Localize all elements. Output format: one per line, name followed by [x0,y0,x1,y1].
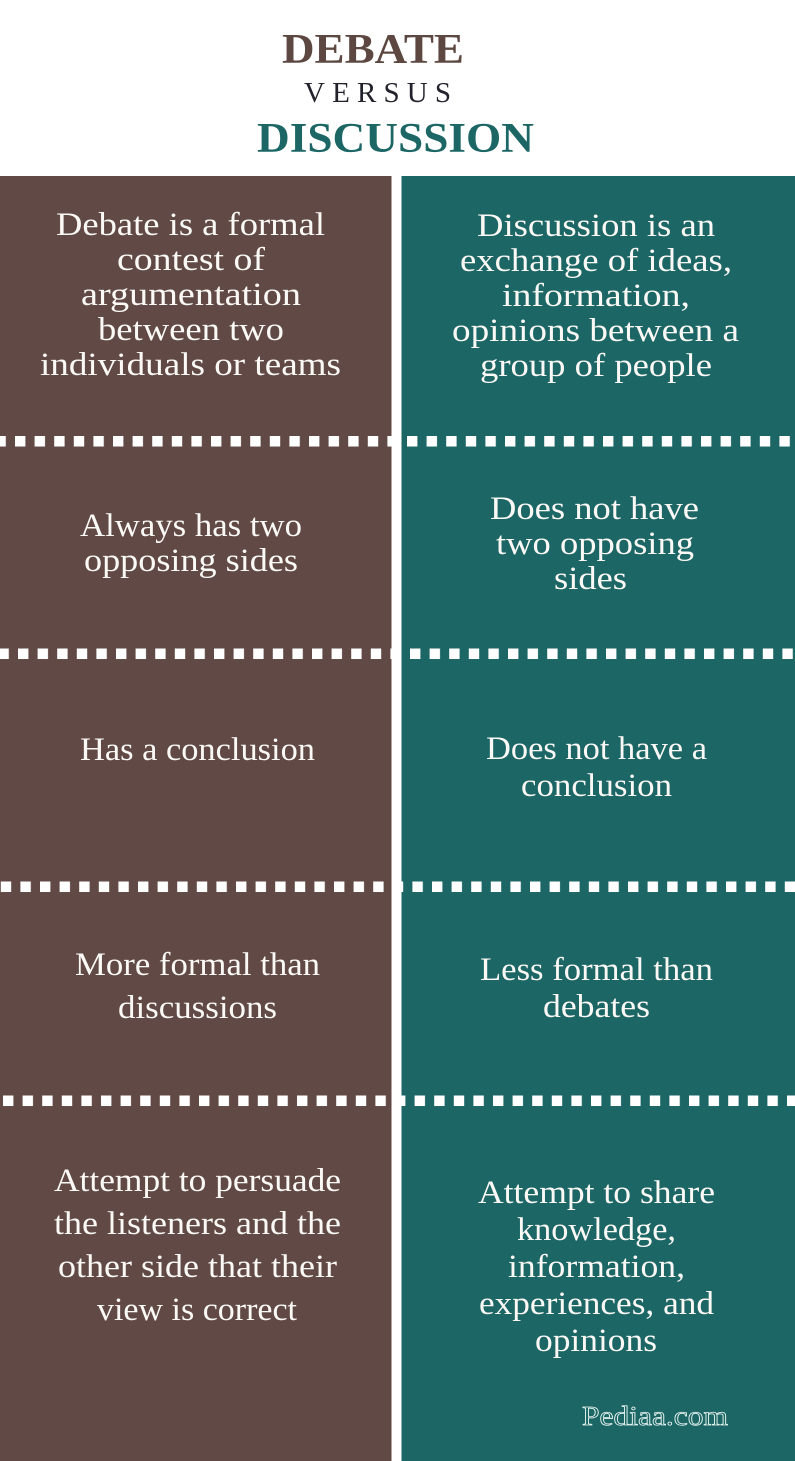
row divider 1 [0,436,795,447]
discussion definition text: group of people [480,348,712,384]
discussion purpose text: opinions [535,1323,657,1359]
debate definition text: argumentation [81,277,301,313]
row divider 3 [0,882,795,892]
row divider 2 [0,648,795,659]
debate formality text: More formal than [75,947,320,983]
discussion purpose text: experiences, and [479,1286,715,1322]
debate sides text [80,508,302,579]
brand: Pediaa.com: Pediaa.com [582,1401,728,1431]
discussion definition text: information, [502,278,690,314]
panel: debate column [0,176,392,1461]
debate definition text: individuals or teams [40,347,341,383]
discussion purpose text: Attempt to share [478,1175,715,1211]
debate sides text: opposing sides [84,543,298,579]
debate definition text: contest of [117,242,265,278]
discussion sides text: Does not have [490,491,699,527]
debate definition text: between two [98,312,284,348]
debate purpose text: view is correct [97,1292,297,1328]
discussion conclusion text: conclusion [521,768,672,804]
title [257,27,534,162]
title: VERSUS [304,77,451,109]
discussion formality text: debates [543,989,650,1025]
discussion sides text: sides [554,561,627,597]
discussion formality text [480,952,713,1025]
discussion definition text: opinions between a [452,313,739,349]
debate formality text: discussions [118,990,277,1026]
title: DISCUSSION [257,116,534,162]
discussion purpose text: information, [508,1249,685,1285]
panel: discussion column [402,176,795,1461]
debate purpose text: other side that their [58,1249,337,1285]
discussion conclusion text [486,731,707,804]
debate definition text: Debate is a formal [56,207,325,243]
discussion definition text: Discussion is an [477,208,715,244]
debate sides text: Always has two [80,508,302,544]
debate purpose text: Attempt to persuade [54,1163,341,1199]
discussion purpose text [478,1175,715,1359]
discussion sides text [490,491,699,597]
discussion definition text [452,208,739,384]
discussion purpose text: knowledge, [517,1212,676,1248]
debate definition text [40,207,341,383]
discussion sides text: two opposing [496,526,694,562]
discussion formality text: Less formal than [480,952,713,988]
row divider 4 [0,1096,795,1106]
discussion definition text: exchange of ideas, [460,243,732,279]
discussion conclusion text: Does not have a [486,731,707,767]
title: DEBATE [282,27,464,73]
debate formality text [75,947,320,1026]
debate conclusion text: Has a conclusion [80,732,315,768]
debate purpose text: the listeners and the [54,1206,341,1242]
debate purpose text [54,1163,341,1328]
